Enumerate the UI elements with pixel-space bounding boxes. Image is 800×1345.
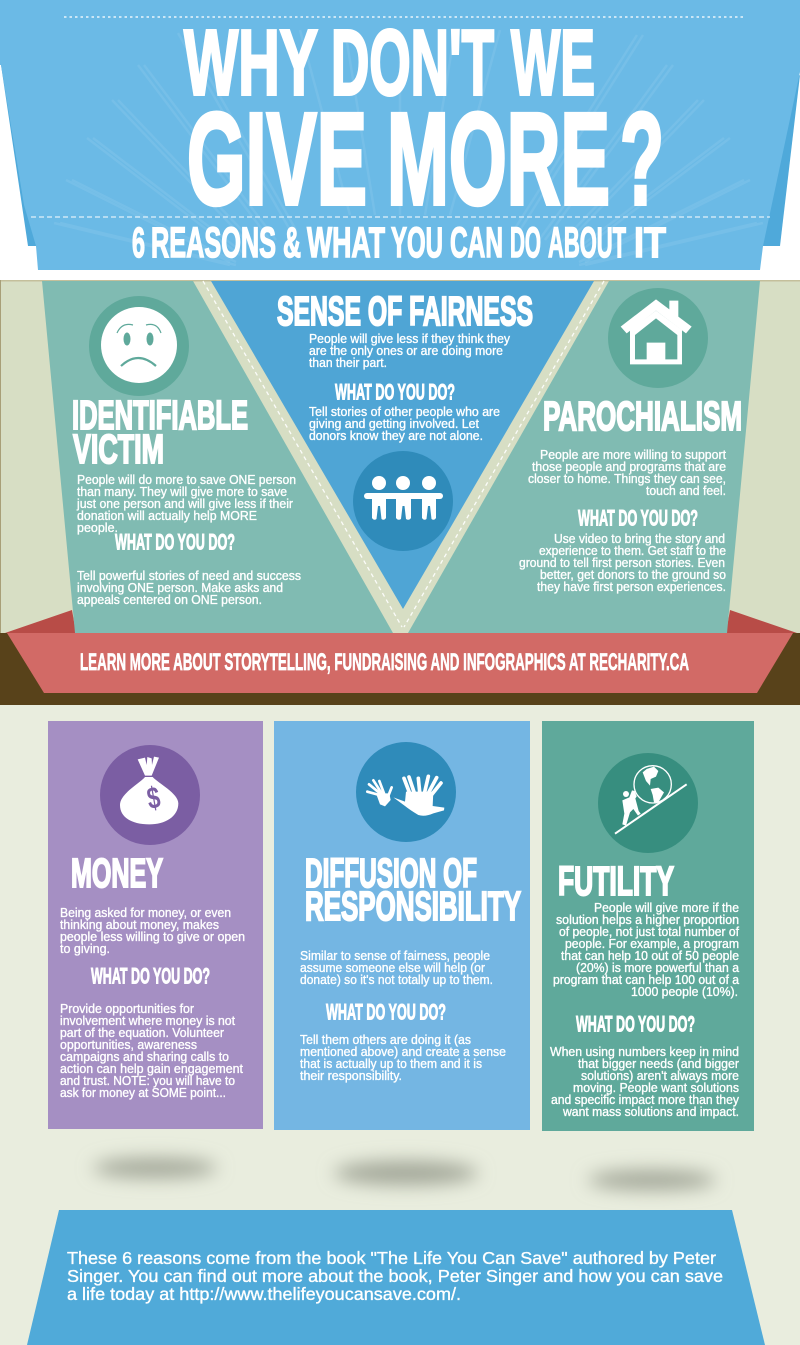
text: futility description: people. For example, a program: [565, 936, 739, 951]
panel: money: [48, 721, 263, 1129]
text: money advice: and trust. NOTE: you will have to: [60, 1073, 235, 1088]
subtitle: YOU: [391, 219, 443, 267]
panel: parochialism: [408, 281, 760, 633]
text: parochialism description: closer to home. Things they can see,: [528, 471, 726, 486]
title: give more?: ?: [620, 85, 664, 232]
text: futility description: People will give more if the: [594, 900, 739, 915]
text: diffusion advice: Tell them others are doing it (as: [300, 1032, 471, 1047]
text: diffusion description: donate) so it's not totally up to them.: [300, 972, 493, 987]
text: parochialism advice: ground to tell first person stories. Even: [519, 555, 725, 570]
text: money description: to giving.: [60, 941, 110, 956]
side flap: right red: [726, 610, 797, 633]
subtitle: 6: [132, 219, 145, 267]
text: identifiable victim description: just one person and will give less if their: [76, 496, 294, 511]
text: diffusion advice: [300, 1032, 506, 1083]
text: money advice: ask for money at SOME point...: [60, 1085, 226, 1100]
subtitle: ABOUT: [548, 219, 626, 267]
text: identifiable victim description: [76, 472, 296, 535]
footer text: Singer. You can find out more about the book, Peter Singer and how you can save: [67, 1266, 723, 1286]
text: parochialism description: those people and programs that are: [532, 459, 726, 474]
subheading: what do you do: WHAT DO YOU DO?: [578, 506, 698, 530]
text: identifiable victim description: donation will actually help MORE: [77, 508, 257, 523]
text: sense of fairness advice: donors know they are not alone.: [309, 428, 483, 443]
text: futility description: (20%) is more powerful than a: [576, 960, 740, 975]
text: parochialism description: touch and feel.: [646, 483, 726, 498]
text: identifiable victim description: than many. They will give more to save: [77, 484, 287, 499]
text: money advice: Provide opportunities for: [60, 1001, 195, 1016]
subheading: what do you do: WHAT DO YOU DO?: [115, 530, 235, 554]
text: identifiable victim advice: involving ONE person. Make asks and: [77, 580, 283, 595]
footer text: [67, 1248, 723, 1304]
title: why don't we: DON'T: [331, 10, 494, 114]
text: money advice: action can help gain engagement: [60, 1061, 243, 1076]
text: identifiable victim description: people.: [77, 520, 118, 535]
heading: sense of fairness: SENSE OF FAIRNESS: [277, 288, 533, 334]
text: money advice: involvement where money is not: [60, 1013, 235, 1028]
subtitle: [132, 219, 666, 267]
text: futility description: that can help 10 out of 50 people: [561, 948, 739, 963]
heading: money: MONEY: [71, 850, 163, 896]
text: futility advice: want mass solutions and impact.: [562, 1104, 739, 1119]
text: futility advice: When using numbers keep in mind: [550, 1044, 739, 1059]
text: money advice: opportunities, awareness: [60, 1037, 197, 1052]
text: futility advice: that bigger needs (and bigger: [578, 1056, 740, 1071]
text: futility advice: and specific impact more than they: [551, 1092, 739, 1107]
icon: person pushing globe uphill: [598, 753, 698, 853]
icon: money bag: [100, 745, 200, 845]
text: parochialism description: [528, 447, 726, 498]
subtitle: CAN: [450, 219, 503, 267]
header banner: [0, 0, 800, 270]
title: why don't we: WHY: [184, 10, 318, 114]
text: futility description: [553, 900, 740, 999]
text: money description: thinking about money, makes: [60, 917, 219, 932]
text: sense of fairness description: People will give less if they think they: [309, 331, 510, 346]
title: why don't we: [184, 10, 595, 114]
subtitle: &: [283, 219, 301, 267]
text: futility description: of people, not just total number of: [559, 924, 739, 939]
icon: money bag: $: [144, 780, 163, 816]
footer text: These 6 reasons come from the book "The Life You Can Save" authored by Peter: [67, 1248, 716, 1268]
text: sense of fairness description: are the only ones or are doing more: [309, 343, 503, 358]
heading: futility: FUTILITY: [558, 858, 674, 904]
footer panel: [27, 1210, 765, 1345]
text: identifiable victim description: People will do more to save ONE person: [77, 472, 296, 487]
ribbon band: [0, 633, 800, 705]
text: diffusion advice: their responsibility.: [300, 1068, 402, 1083]
icon: hands: [356, 742, 456, 842]
text: futility description: program that can help 100 out of a: [553, 972, 740, 987]
text: futility advice: [550, 1044, 740, 1119]
footer text: a life today at http://www.thelifeyoucansave.com/.: [67, 1284, 461, 1304]
text: money advice: [60, 1001, 243, 1100]
heading: diffusion of responsibility: RESPONSIBILITY: [305, 883, 521, 929]
heading: identifiable victim: [72, 392, 248, 472]
heading: diffusion of responsibility: DIFFUSION OF: [305, 850, 477, 896]
text: money description: Being asked for money, or even: [60, 905, 231, 920]
subheading: what do you do: WHAT DO YOU DO?: [326, 1000, 446, 1024]
title: give more?: MORE: [387, 85, 610, 232]
text: diffusion description: Similar to sense of fairness, people: [300, 948, 490, 963]
text: sense of fairness advice: giving and getting involved. Let: [309, 416, 479, 431]
title: give more?: [187, 85, 664, 232]
heading: identifiable victim: IDENTIFIABLE: [72, 392, 248, 438]
subheading: what do you do: WHAT DO YOU DO?: [91, 964, 210, 988]
text: futility description: 1000 people (10%).: [631, 984, 738, 999]
title: why don't we: WE: [511, 10, 595, 114]
subheading: what do you do: WHAT DO YOU DO?: [335, 380, 455, 404]
text: money advice: part of the equation. Volunteer: [60, 1025, 225, 1040]
text: money advice: campaigns and sharing calls to: [60, 1049, 229, 1064]
panel: sense of fairness: [211, 281, 594, 609]
subtitle: WHAT: [307, 219, 385, 267]
subtitle: REASONS: [151, 219, 276, 267]
text: diffusion advice: that is actually up to them and it is: [300, 1056, 482, 1071]
panel: futility: [542, 721, 754, 1131]
text: parochialism advice: better, get donors to the ground so: [540, 567, 726, 582]
text: diffusion description: [300, 948, 493, 987]
panel: identifiable victim: [42, 281, 393, 633]
text: diffusion description: assume someone else will help (or: [300, 960, 486, 975]
subtitle: DO: [510, 219, 541, 267]
text: parochialism advice: they have first person experiences.: [537, 579, 726, 594]
heading: diffusion of responsibility: [305, 850, 521, 929]
text: identifiable victim advice: [77, 568, 301, 607]
heading: identifiable victim: VICTIM: [73, 426, 164, 472]
text: parochialism advice: Use video to bring the story and: [554, 531, 725, 546]
text: parochialism advice: experience to them. Get staff to the: [539, 543, 726, 558]
panel: diffusion of responsibility: [274, 721, 530, 1130]
text: parochialism description: People are more willing to support: [540, 447, 726, 462]
icon: sad face: [89, 296, 189, 396]
text: futility description: solution helps a higher proportion: [556, 912, 739, 927]
text: sense of fairness description: than their part.: [309, 355, 387, 370]
text: futility advice: moving. People want solutions: [573, 1080, 739, 1095]
text: sense of fairness description: [309, 331, 510, 370]
panel shadows: [93, 1158, 716, 1190]
text: parochialism advice: [519, 531, 726, 594]
subheading: what do you do: WHAT DO YOU DO?: [576, 1012, 695, 1036]
icon: three people: [353, 451, 453, 551]
text: futility advice: solutions) aren't always more: [581, 1068, 739, 1083]
text: identifiable victim advice: appeals centered on ONE person.: [77, 592, 262, 607]
text: money description: people less willing to give or open: [60, 929, 245, 944]
text: diffusion advice: mentioned above) and create a sense: [300, 1044, 506, 1059]
text: money description: [60, 905, 245, 956]
subtitle: IT: [634, 219, 666, 267]
icon: house: [608, 288, 708, 388]
text: sense of fairness advice: Tell stories of other people who are: [309, 404, 500, 419]
text: identifiable victim advice: Tell powerful stories of need and success: [77, 568, 301, 583]
text: sense of fairness advice: [309, 404, 500, 443]
side flap: left red: [5, 610, 76, 633]
title: give more?: GIVE: [187, 85, 367, 232]
